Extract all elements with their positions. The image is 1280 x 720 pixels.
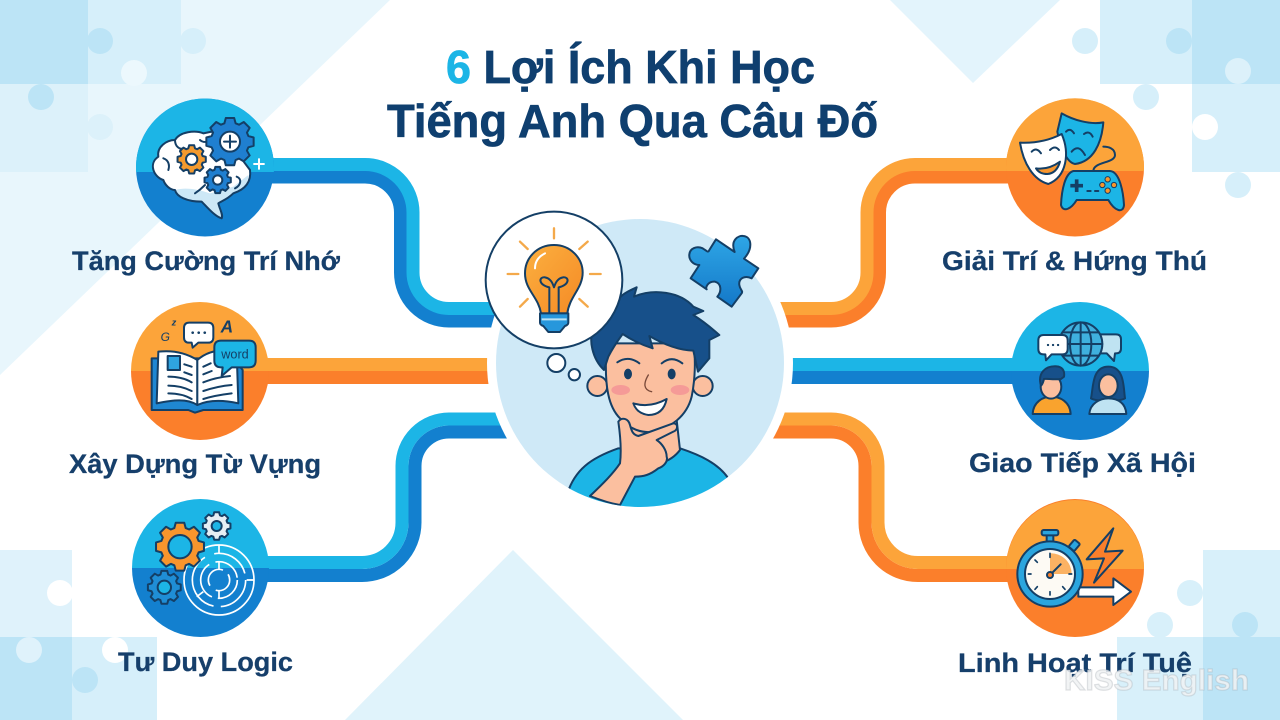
- puzzle pieces: bottom right: [1117, 550, 1280, 720]
- connector: communication to centre: [780, 358, 1020, 384]
- icon: circle badge: [132, 499, 269, 637]
- icon: circle badge: [1006, 499, 1144, 637]
- icon: circle badge: [136, 98, 274, 236]
- benefit 5: communication: [969, 302, 1196, 478]
- benefit 3: logic: [118, 499, 293, 677]
- benefit 2: vocabulary: [69, 302, 321, 479]
- connector: vocabulary to centre: [262, 358, 502, 384]
- icon: open book with speech bubbles: z: [171, 318, 177, 328]
- icon: open book with speech bubbles: [152, 316, 256, 413]
- puzzle pieces: top right: [1072, 0, 1280, 198]
- icon: open book with speech bubbles: G: [161, 330, 170, 344]
- icon: circle badge: [131, 302, 269, 440]
- icon: open book with speech bubbles: word: [220, 347, 249, 361]
- icon: gears and maze: [148, 512, 254, 615]
- label: Giải Trí & Hứng Thú: [942, 246, 1207, 276]
- connector: memory to centre: [260, 164, 510, 321]
- connector: entertainment to centre: [770, 164, 1020, 321]
- title: [387, 41, 878, 147]
- label: Giao Tiếp Xã Hội: [969, 448, 1196, 478]
- label: Tư Duy Logic: [118, 647, 293, 677]
- icon: circle badge: [1011, 302, 1149, 440]
- title: 6 Lợi Ích Khi Học: [446, 41, 815, 93]
- puzzle pieces: bottom left: [0, 550, 157, 720]
- label: Tăng Cường Trí Nhớ: [72, 246, 340, 276]
- connector: mental agility to centre: [760, 419, 1020, 576]
- title: Tiếng Anh Qua Câu Đố: [387, 95, 878, 147]
- benefit 6: mental agility: [958, 499, 1192, 678]
- label: Linh Hoạt Trí Tuệ: [958, 648, 1192, 678]
- icon: brain with gears: [153, 118, 265, 218]
- icon: theatre masks and game controller: [1020, 113, 1124, 210]
- icon: globe, chat bubbles and two people: [1033, 322, 1126, 414]
- central illustration: thinking student: [486, 210, 793, 517]
- icon: stopwatch, lightning bolt and arrow: [1017, 528, 1131, 607]
- icon: circle badge: [1006, 98, 1144, 236]
- puzzle piece: [689, 236, 758, 307]
- hand on chin: [590, 419, 677, 505]
- label: Xây Dựng Từ Vựng: [69, 449, 321, 479]
- thought bubble with light bulb: [486, 212, 622, 380]
- puzzle pieces: top left: [0, 0, 206, 172]
- icon: open book with speech bubbles: A: [220, 316, 233, 336]
- benefit 1: memory: [72, 98, 340, 276]
- benefit 4: entertainment: [942, 98, 1207, 276]
- connector: logic to centre: [260, 419, 520, 576]
- watermark: KISS English: [1064, 665, 1249, 697]
